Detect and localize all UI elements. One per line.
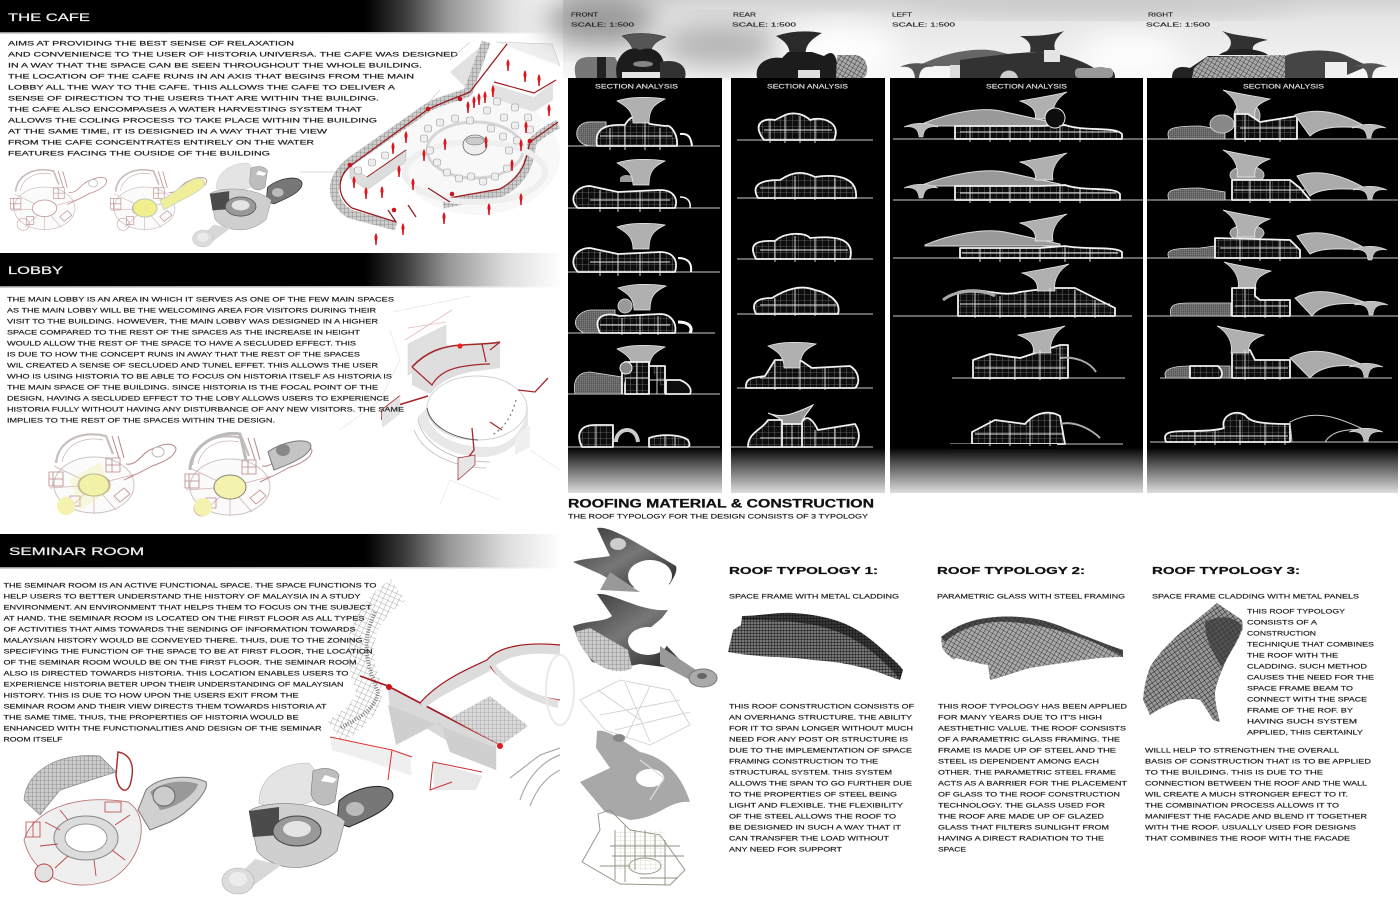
roof 3 description: FRAME OF THE ROF. BY (1247, 708, 1354, 714)
label: SECTION ANALYSIS (986, 84, 1067, 90)
roof 2 description: TECHNOLOGY. THE GLASS USED FOR (938, 802, 1105, 810)
panel background (1147, 78, 1398, 493)
lobby body text (7, 296, 405, 424)
panel background (890, 78, 1143, 493)
exploded: second roof layer with mesh ring (573, 594, 717, 687)
sky backdrop (545, 0, 1400, 78)
roof 3 description: MANIFEST THE FACADE AND BLEND IT TOGETHER (1145, 814, 1367, 820)
roof 3 description: CONSISTS OF A (1247, 620, 1318, 626)
roof 3 render (1143, 603, 1243, 722)
panel: the cafe (0, 0, 562, 247)
lobby header band (0, 253, 562, 288)
roofing heading (568, 498, 874, 520)
roof 1 description: CAN TRANSFER THE LOAD WITHOUT (729, 836, 889, 842)
seminar body text: OF THE SEMINAR ROOM WOULD BE ON THE FIRST FLOOR. THE SEMINAR ROOM (4, 660, 357, 666)
lobby header band: LOBBY (8, 265, 64, 277)
roof typology 1 (728, 565, 914, 854)
seminar body text: AT HAND. THE SEMINAR ROOM IS LOCATED ON THE FIRST FLOOR AS ALL TYPES (4, 616, 365, 622)
roof 1 description: THIS ROOF CONSTRUCTION CONSISTS OF (729, 704, 914, 710)
roof 2 description: ACTS AS A BARRIER FOR THE PLACEMENT (938, 780, 1127, 788)
label: SECTION ANALYSIS (595, 84, 678, 90)
roof 2 description: HAVING A DIRECT RADIATION TO THE (938, 836, 1105, 842)
seminar body text: SEMINAR ROOM AND THEIR VIEW DIRECTS THEM TOWARDS HISTORIA AT (4, 704, 326, 710)
seminar body text: HISTORY. THIS IS DUE TO HOW UPON THE USERS EXIT FROM THE (4, 692, 299, 700)
panel background (731, 78, 885, 493)
roof 3 description: HAVING SUCH SYSTEM (1247, 718, 1357, 726)
seminar plan drawing (24, 752, 207, 885)
roof typology 1: ROOF TYPOLOGY 1: (729, 565, 878, 577)
roof 3 description: BASIS OF CONSTRUCTION THAT IS TO BE APPLIED (1145, 758, 1371, 766)
elevation labels: SCALE: 1:500 (1146, 22, 1210, 28)
roof 3 description: TECHNIQUE THAT COMBINES (1247, 642, 1375, 648)
roof 2 description: OF GLASS TO THE ROOF CONSTRUCTION (938, 792, 1120, 798)
lobby body text: IS DUE TO HOW THE CONCEPT RUNS IN AWAY THAT THE REST OF THE SPACES (7, 352, 361, 358)
cafe header band (0, 0, 562, 34)
seminar header band (0, 534, 562, 568)
lobby body text: THE MAIN SPACE OF THE BUILDING. SINCE HISTORIA IS THE FOCAL POINT OF THE (7, 384, 379, 392)
lobby body text: THE MAIN LOBBY IS AN AREA IN WHICH IT SERVES AS ONE OF THE FEW MAIN SPACES (7, 296, 395, 304)
elevation labels: FRONT (571, 12, 599, 18)
roof 1 render (728, 613, 903, 680)
roof 2 description: OF A PARAMETRIC GLASS FRAMING. THE (938, 736, 1121, 744)
lobby small plan: yellow lobby (49, 434, 176, 515)
elevation labels: SCALE: 1:500 (892, 22, 955, 28)
seminar body text: ENVIRONMENT. AN ENVIRONMENT THAT HELPS THEM TO FOCUS ON THE SUBJECT (4, 604, 372, 612)
exploded: grey floor slab (580, 731, 690, 820)
roof 1 description: OF THE STEEL ALLOWS THE ROOF TO (729, 814, 896, 820)
front elevation (575, 33, 686, 78)
cafe body text: AT THE SAME TIME, IT IS DESIGNED IN A WAY THAT THE VIEW (8, 128, 328, 136)
roof 1 description: ALLOWS THE SPAN TO GO FURTHER DUE (729, 780, 913, 788)
roof 3 description: WITH THE ROOF. USUALLY USED FOR DESIGNS (1145, 824, 1357, 832)
cafe body text: THE CAFE ALSO ENCOMPASES A WATER HARVESTING SYSTEM THAT (8, 106, 362, 114)
lobby body text: IMPLIES TO THE REST OF THE SPACES WITHIN THE DESIGN. (7, 418, 275, 424)
roof 3 description: WIL CREATE A MUCH STRONGER EFECT TO IT. (1145, 792, 1348, 798)
roof 2 description: STEEL IS DEPENDENT AMONG EACH (938, 758, 1099, 766)
roof 1 description: FOR IT TO SPAN LONGER WITHOUT MUCH (729, 726, 913, 732)
lobby body text: WIL CREATED A SENSE OF SECLUDED AND TUNEL EFFET. THIS ALLOWS THE USER (7, 362, 378, 370)
roof 3 description: SPACE FRAME BEAM TO (1247, 686, 1353, 692)
panel: section analysis, left column (890, 78, 1143, 493)
roof typology 2: ROOF TYPOLOGY 2: (937, 565, 1085, 577)
roof 1 description: FRAMING CONSTRUCTION TO THE (729, 758, 879, 766)
seminar body text: ALSO IS DIRECTED TOWARDS HISTORIA. THIS LOCATION ENABLES USERS TO (4, 670, 349, 678)
label: SECTION ANALYSIS (767, 84, 848, 90)
panel: section analysis, right column (1147, 78, 1398, 493)
panel: elevations sky strip (545, 0, 1400, 78)
roof 3 description: APPLIED, THIS CERTAINLY (1247, 730, 1364, 736)
roof typology 3: SPACE FRAME CLADDING WITH METAL PANELS (1152, 594, 1360, 600)
elevation labels: RIGHT (1148, 12, 1174, 18)
lobby body text: WOULD ALLOW THE REST OF THE SPACE TO HAVE A SECLUDED EFFECT. THIS (7, 340, 357, 348)
cafe axonometric drawing with red figures (300, 42, 560, 245)
roof 2 description: SPACE (938, 846, 967, 854)
cafe body text: FROM THE CAFE CONCENTRATES ENTIRELY ON THE WATER (8, 140, 314, 146)
rear elevation (757, 31, 867, 78)
exploded: top roof layer (573, 528, 676, 592)
roof typology 2 (937, 565, 1127, 854)
roof 3 description: CONSTRUCTION (1247, 630, 1316, 638)
roof 3 description (1145, 608, 1375, 842)
lobby body text: VISIT TO THE BUILDING. HOWEVER, THE MAIN LOBBY WAS DESIGNED IN A HIGHER (7, 318, 378, 326)
front sections drawings (568, 97, 720, 447)
roofing heading: ROOFING MATERIAL & CONSTRUCTION (568, 498, 874, 510)
roof typology 2: PARAMETRIC GLASS WITH STEEL FRAMING (937, 594, 1125, 600)
roof 2 description: OTHER. THE PARAMETRIC STEEL FRAME (938, 770, 1117, 776)
roof 3 description: THE ROOF WITH THE (1247, 652, 1339, 660)
lobby body text: AS THE MAIN LOBBY WILL BE THE WELCOMING AREA FOR VISITORS DURING THEIR (7, 308, 376, 314)
left elevation (900, 31, 1115, 78)
elevation labels: LEFT (892, 12, 913, 18)
roof 3 description: TO THE BUILDING. THIS IS DUE TO THE (1145, 770, 1324, 776)
panel: section analysis, front column (568, 78, 722, 493)
exploded: wireframe layer (580, 680, 690, 745)
roof 3 description: THE COMBINATION PROCESS ALLOWS IT TO (1145, 802, 1339, 810)
right elevation (1172, 31, 1387, 78)
roof 2 description: FOR MANY YEARS DUE TO IT'S HIGH (938, 714, 1102, 722)
roof 1 description: NEED FOR ANY POST OR STRUCTURE IS (729, 736, 909, 744)
cafe body text: SENSE OF DIRECTION TO THE USERS THAT ARE WITHIN THE BUILDING. (8, 96, 379, 102)
roof 3 description: CAUSES THE NEED FOR THE (1247, 674, 1375, 682)
seminar body text: SPECIFYING THE FUNCTION OF THE SPACE TO BE AT FIRST FLOOR, THE LOCATION (4, 648, 373, 656)
rear sections drawings (731, 113, 873, 448)
lobby body text: HISTORIA FULLY WITHOUT HAVING ANY DISTURBANCE OF ANY NEW VISITORS. THE SAME (7, 406, 405, 414)
label: SECTION ANALYSIS (1243, 84, 1324, 90)
right sections drawings (1147, 90, 1398, 445)
cafe body text: AND CONVENIENCE TO THE USER OF HISTORIA UNIVERSA. THE CAFE WAS DESIGNED (8, 52, 458, 58)
lobby small plan: massing overlay (185, 433, 312, 516)
panel: seminar room (0, 534, 562, 894)
panel: roofing material and construction (546, 498, 1375, 885)
elevation labels: SCALE: 1:500 (732, 22, 796, 28)
roof 2 description: GLASS THAT FILTERS SUNLIGHT FROM (938, 824, 1109, 832)
roof 1 description: DUE TO THE IMPLEMENTATION OF SPACE (729, 748, 913, 754)
seminar body text: OF ACTIVITIES THAT AIMS TOWARDS THE SENDING OF INFORMATION TOWARDS (4, 626, 356, 634)
roof 1 description: LIGHT AND FLEXIBLE. THE FLEXIBILITY (729, 802, 904, 810)
cafe small plan: red outline (10, 170, 107, 230)
roof 3 description: CONNECT WITH THE SPACE (1247, 696, 1368, 704)
lobby body text: WHO IS USING HISTORIA TO BE ABLE TO FOCUS ON HISTORIA ITSELF AS HISTORIA IS (7, 374, 393, 380)
exploded axonometric stack (546, 528, 717, 885)
cafe header band: THE CAFE (8, 12, 90, 24)
roof 1 description: ANY NEED FOR SUPPORT (729, 846, 842, 854)
seminar body text: MALAYSIAN HISTORY WOULD BE CONVEYED THERE. THUS, DUE TO THE ZONING (4, 638, 362, 644)
elevation labels: SCALE: 1:500 (571, 22, 634, 28)
roof 2 description (938, 704, 1127, 854)
lobby axonometric drawing (340, 296, 560, 505)
panel: section analysis, rear column (731, 78, 885, 493)
cafe body text: IN A WAY THAT THE SPACE CAN BE SEEN THROUGHOUT THE WHOLE BUILDING. (8, 62, 422, 70)
panel: lobby (0, 253, 562, 516)
cafe body text: ALLOWS THE COLING PROCESS TO TAKE PLACE WITHIN THE BUILDING (8, 118, 377, 124)
roof 2 description: THIS ROOF TYPOLOGY HAS BEEN APPLIED (938, 704, 1127, 710)
elevation labels: REAR (733, 12, 756, 18)
roof 2 description: AESTHETHIC VALUE. THE ROOF CONSISTS (938, 726, 1127, 732)
exploded: structural frame (582, 810, 685, 885)
seminar body text (4, 582, 376, 744)
seminar axonometric drawing (330, 590, 560, 806)
roof 1 description (729, 704, 914, 854)
lobby body text: DESIGN, HAVING A SECLUDED EFFECT TO THE LOBY ALLOWS USERS TO EXPERIENCE (7, 396, 390, 402)
roof 2 description: FRAME IS MADE UP OF STEEL AND THE (938, 748, 1117, 754)
cafe small grey massing model (193, 163, 302, 247)
roof 3 description: THIS ROOF TYPOLOGY (1247, 608, 1346, 616)
cafe body text (8, 40, 458, 158)
roof 3 description: WILLL HELP TO STRENGTHEN THE OVERALL (1145, 748, 1339, 754)
seminar body text: ROOM ITSELF (4, 736, 62, 744)
seminar body text: THE SAME TIME. THUS, THE PROPERTIES OF HISTORIA WOULD BE (4, 714, 299, 722)
roof 1 description: AN OVERHANG STRUCTURE. THE ABILITY (729, 714, 913, 722)
roof 1 description: STRUCTURAL SYSTEM. THIS SYSTEM (729, 770, 892, 776)
cafe body text: LOBBY ALL THE WAY TO THE CAFE. THIS ALLOWS THE CAFE TO DELIVER A (8, 84, 396, 92)
seminar grey massing model (222, 763, 393, 894)
roof 2 description: THE ROOF ARE MADE UP OF GLAZED (938, 814, 1104, 820)
seminar body text: HELP USERS TO BETTER UNDERSTAND THE HISTORY OF MALAYSIA IN A STUDY (4, 594, 361, 600)
seminar body text: EXPERIENCE HISTORIA BETER UPON THEIR UNDERSTANDING OF MALAYSIAN (4, 682, 344, 688)
left sections drawings (893, 92, 1143, 449)
roof 1 description: BE DESIGNED IN SUCH A WAY THAT IT (729, 824, 901, 832)
elevation labels (571, 12, 1210, 28)
cafe small plan: yellow highlight (110, 170, 207, 230)
roofing heading: THE ROOF TYPOLOGY FOR THE DESIGN CONSISTS OF 3 TYPOLOGY (568, 514, 869, 520)
lobby body text: SPACE COMPARED TO THE REST OF THE SPACES AS THE INCREASE IN HEIGHT (7, 330, 360, 336)
seminar header band: SEMINAR ROOM (9, 546, 144, 558)
roof 3 description: CONNECTION BETWEEN THE ROOF AND THE WALL (1145, 780, 1367, 788)
seminar body text: ENHANCED WITH THE FUNCTIONALITIES AND DESIGN OF THE SEMINAR (4, 726, 322, 732)
cafe body text: AIMS AT PROVIDING THE BEST SENSE OF RELAXATION (8, 40, 294, 48)
panel background (568, 78, 722, 493)
cafe body text: THE LOCATION OF THE CAFE RUNS IN AN AXIS THAT BEGINS FROM THE MAIN (8, 74, 414, 80)
roof 1 description: TO THE PROPERTIES OF STEEL BEING (729, 792, 897, 798)
roof typology 3 (1143, 565, 1375, 842)
roof typology 3: ROOF TYPOLOGY 3: (1152, 565, 1300, 577)
roof typology 1: SPACE FRAME WITH METAL CLADDING (729, 594, 899, 600)
roof 2 render (941, 616, 1123, 680)
cafe body text: FEATURES FACING THE OUSIDE OF THE BUILDING (8, 150, 270, 158)
roof 3 description: THAT COMBINES THE ROOF WITH THE FACADE (1145, 836, 1351, 842)
roof 3 description: CLADDING. SUCH METHOD (1247, 664, 1367, 670)
seminar body text: THE SEMINAR ROOM IS AN ACTIVE FUNCTIONAL SPACE. THE SPACE FUNCTIONS TO (4, 582, 376, 590)
